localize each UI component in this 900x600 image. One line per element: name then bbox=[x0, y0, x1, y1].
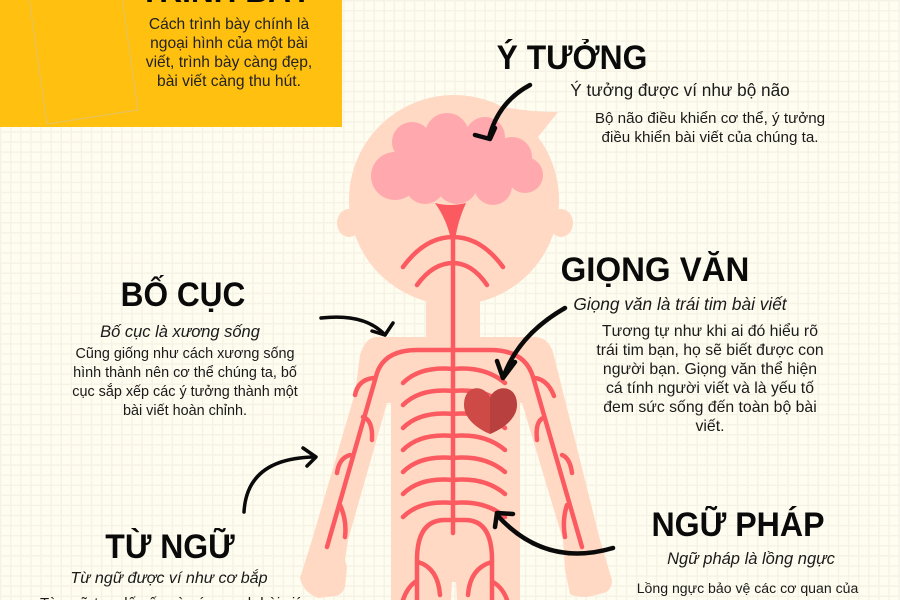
subtitle: giọng văn: Giọng văn là trái tim bài viết bbox=[573, 294, 787, 314]
section: giọng văn bbox=[561, 251, 824, 435]
arrow: to spine bbox=[321, 317, 393, 335]
heading: bố cục: BỐ CỤC bbox=[121, 276, 245, 314]
text: ý tưởng description: Bộ não điều khiển cơ thể, ý tưởng bbox=[595, 110, 825, 127]
arrow: to ribcage bbox=[495, 513, 613, 553]
text: ý tưởng description: điều khiển bài viết của chúng ta. bbox=[602, 129, 818, 146]
text: giọng văn description bbox=[596, 323, 824, 435]
subtitle: ngữ pháp: Ngữ pháp là lồng ngực bbox=[667, 550, 835, 568]
brain bbox=[371, 113, 543, 205]
text: trình bày description: Cách trình bày chính là bbox=[149, 16, 309, 33]
text: trình bày description: ngoại hình của một bài bbox=[150, 35, 308, 52]
section: ý tưởng bbox=[497, 39, 825, 146]
subtitle: từ ngữ: Từ ngữ được ví như cơ bắp bbox=[70, 569, 268, 587]
text: trình bày description: viết, trình bày càng đẹp, bbox=[146, 54, 312, 71]
body silhouette bbox=[300, 95, 612, 600]
blood vessels bbox=[327, 203, 582, 600]
subtitle: bố cục: Bố cục là xương sống bbox=[100, 323, 260, 341]
arrow: to heart bbox=[497, 308, 565, 378]
subtitle: ý tưởng: Ý tưởng được ví như bộ não bbox=[570, 80, 790, 100]
section: ngữ pháp bbox=[637, 506, 858, 596]
text: giọng văn description: đem sức sống đến toàn bộ bài bbox=[603, 399, 817, 416]
text: bố cục description: Cũng giống như cách xương sống bbox=[75, 346, 295, 362]
icon: heart bbox=[464, 388, 517, 434]
text: giọng văn description: trái tim bạn, họ sẽ biết được con bbox=[596, 342, 824, 359]
text: bố cục description: hình thành nên cơ thể chúng ta, bố bbox=[73, 365, 297, 381]
heading: ngữ pháp: NGỮ PHÁP bbox=[651, 506, 825, 544]
arrow: to muscle bbox=[244, 448, 316, 512]
panel: trình bày bbox=[0, 0, 342, 127]
text: giọng văn description: viết. bbox=[696, 418, 724, 435]
heading: giọng văn: GIỌNG VĂN bbox=[561, 251, 749, 289]
section: bố cục bbox=[72, 275, 298, 419]
text: bố cục description: cục sắp xếp các ý tưởng thành một bbox=[72, 384, 298, 400]
text: trình bày description bbox=[146, 16, 312, 90]
heading: ý tưởng: Ý TƯỞNG bbox=[497, 39, 647, 77]
heading: từ ngữ: TỪ NGỮ bbox=[105, 528, 235, 566]
text: ý tưởng description bbox=[595, 110, 825, 146]
text: giọng văn description: Tương tự như khi ai đó hiểu rõ bbox=[602, 323, 818, 340]
text: giọng văn description: người bạn. Giọng văn thể hiện bbox=[603, 361, 817, 378]
text: bố cục description bbox=[72, 346, 298, 419]
arrow: to brain bbox=[475, 85, 530, 139]
decorative tilted sheet outline bbox=[28, 0, 138, 125]
text: bố cục description: bài viết hoàn chỉnh. bbox=[123, 403, 247, 419]
section: từ ngữ bbox=[40, 528, 300, 600]
text: ngữ pháp description: Lồng ngực bảo vệ các cơ quan của bbox=[637, 580, 858, 596]
text: trình bày description: bài viết càng thu hút. bbox=[157, 73, 301, 90]
text: giọng văn description: cá tính người viết và là yếu tố bbox=[606, 380, 814, 397]
